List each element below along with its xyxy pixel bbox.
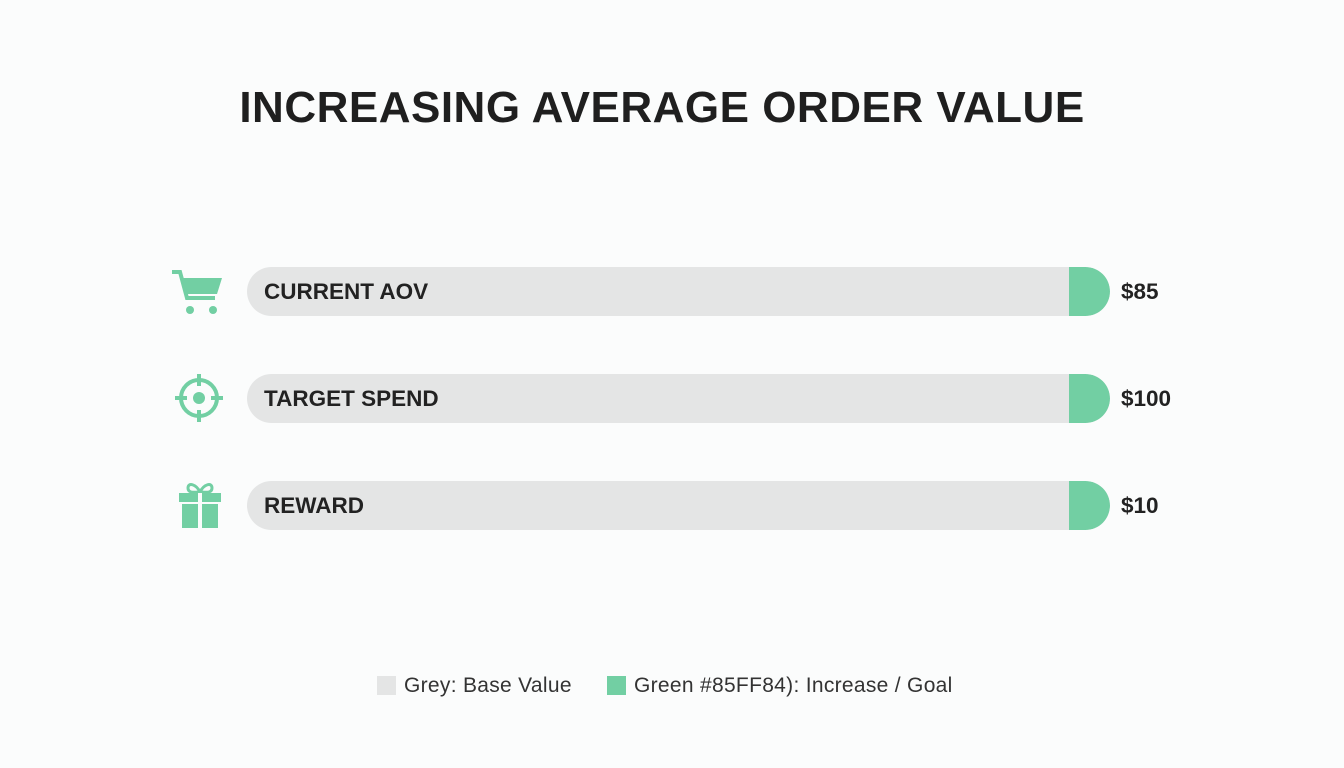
icon: target	[175, 374, 223, 422]
legend: green swatch	[607, 676, 626, 695]
legend: grey swatch	[377, 676, 396, 695]
legend	[377, 674, 953, 697]
row: target spend	[247, 374, 1110, 423]
row: reward: REWARD	[264, 493, 364, 518]
value: $10: $10	[1121, 493, 1159, 518]
row: current aov	[247, 267, 1110, 316]
icon: gift	[179, 483, 221, 528]
legend: grey text: Grey: Base Value	[404, 674, 572, 697]
value: $85: $85	[1121, 279, 1159, 304]
title: INCREASING AVERAGE ORDER VALUE	[239, 83, 1085, 132]
row: reward	[247, 481, 1110, 530]
value: $100: $100	[1121, 386, 1171, 411]
row: target spend: TARGET SPEND	[264, 386, 439, 411]
legend: green text: Green #85FF84): Increase / Goal	[634, 674, 953, 697]
row: current aov: CURRENT AOV	[264, 279, 428, 304]
icon: shopping cart	[172, 270, 222, 314]
